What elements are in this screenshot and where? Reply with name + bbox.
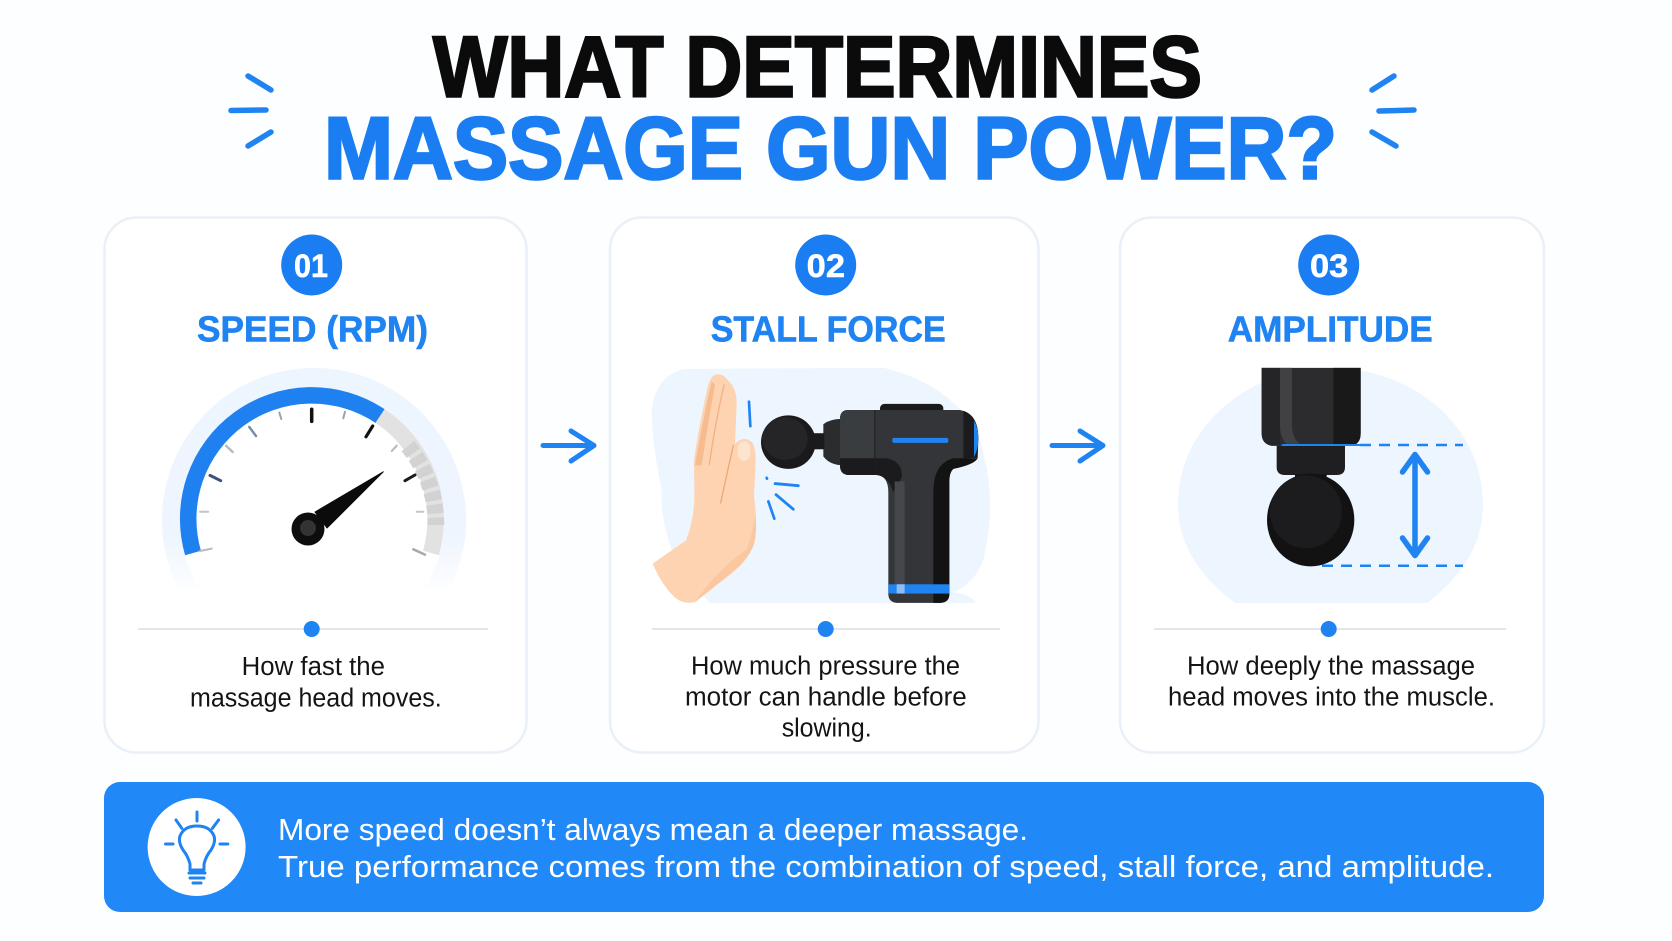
divider with dot	[1154, 621, 1506, 637]
badge 03: 03	[1310, 248, 1348, 284]
description: stall force: motor can handle before	[685, 684, 967, 712]
callout text: More speed doesn’t always mean a deeper massage.	[278, 812, 1028, 847]
badge 03	[1298, 234, 1359, 296]
arrow: speed to stall force	[543, 431, 594, 461]
divider with dot	[138, 621, 488, 637]
badge 01: 01	[294, 248, 328, 284]
title	[324, 20, 1337, 198]
badge 02	[795, 234, 856, 296]
amplitude dashed limits	[1282, 445, 1463, 566]
description: amplitude: head moves into the muscle.	[1168, 684, 1495, 712]
hand	[653, 374, 756, 603]
callout banner	[104, 782, 1544, 912]
title line 1: WHAT DETERMINES	[433, 20, 1202, 116]
description: stall force: slowing.	[782, 714, 872, 742]
illustration: hand stopping massage gun	[652, 368, 990, 603]
description: amplitude	[1168, 652, 1495, 712]
gauge needle	[292, 472, 383, 546]
heading: amplitude: AMPLITUDE	[1228, 308, 1433, 350]
description: speed	[190, 653, 442, 712]
description: speed: massage head moves.	[190, 684, 442, 712]
double arrow	[1402, 454, 1428, 556]
description: amplitude: How deeply the massage	[1187, 652, 1475, 680]
description: stall force: How much pressure the	[691, 652, 960, 680]
illustration: amplitude of massage head	[1178, 368, 1483, 603]
divider with dot	[652, 621, 1000, 637]
heading: stall force: STALL FORCE	[711, 308, 946, 350]
impact lines	[749, 402, 798, 519]
arrow: stall force to amplitude	[1052, 431, 1103, 461]
title line 2: MASSAGE GUN POWER?	[324, 98, 1337, 198]
panel: amplitude	[1120, 218, 1544, 752]
callout text	[278, 812, 1494, 884]
description: stall force	[685, 652, 967, 742]
badge 01	[281, 234, 342, 296]
badge 02: 02	[807, 248, 845, 284]
icon: left title sparks	[231, 76, 271, 146]
icon: right title sparks	[1372, 76, 1414, 146]
icon: light bulb	[148, 798, 246, 896]
panel: speed	[104, 218, 526, 752]
description: speed: How fast the	[242, 653, 385, 681]
chart: speedometer gauge	[162, 368, 466, 568]
panel: stall force	[610, 218, 1038, 752]
massage gun head	[1262, 368, 1361, 566]
callout text: True performance comes from the combination of speed, stall force, and amplitude.	[278, 849, 1494, 884]
heading: speed (rpm): SPEED (RPM)	[197, 308, 428, 350]
massage gun	[761, 404, 978, 603]
